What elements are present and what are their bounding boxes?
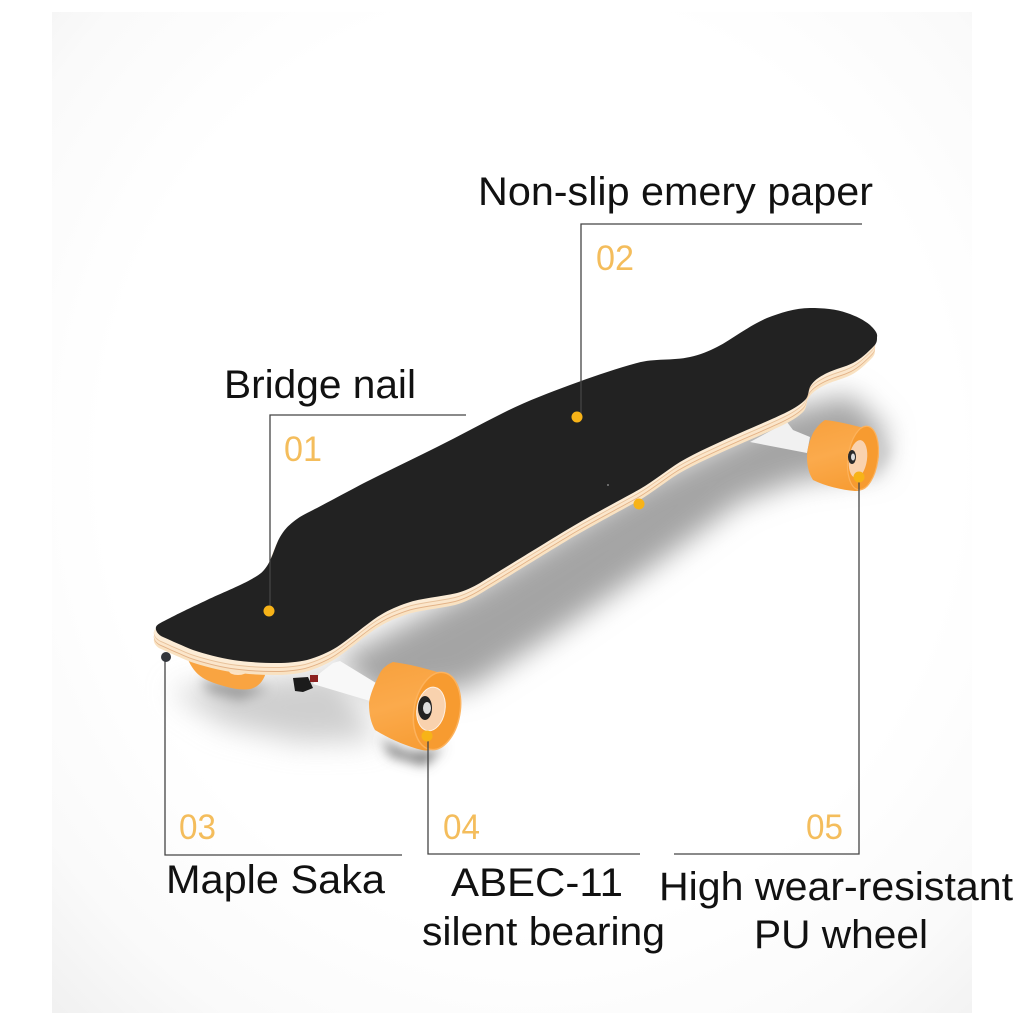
back right wheel <box>807 420 882 492</box>
callout 05: high wear-resistant PU wheel: PU wheel <box>754 913 928 957</box>
callout 02: non-slip emery paper: Non-slip emery paper <box>478 170 873 214</box>
callout 03: maple saka: 03 <box>179 808 216 847</box>
front wheel <box>369 662 466 753</box>
callout 03: maple saka: Maple Saka <box>166 858 386 902</box>
callout 01: bridge nail: Bridge nail <box>224 363 416 407</box>
callout 02: non-slip emery paper: 02 <box>596 239 634 278</box>
deck: maple plywood edge and grip tape <box>154 308 877 675</box>
callout 04: ABEC-11 silent bearing: ABEC-11 <box>451 861 623 905</box>
callout 05: high wear-resistant PU wheel: High wear-resistant <box>659 865 1013 909</box>
far truck (white hanger) <box>750 422 810 453</box>
callout 04: ABEC-11 silent bearing: silent bearing <box>422 910 665 954</box>
rear truck and back wheel <box>185 652 266 690</box>
front truck (white hanger) <box>293 661 376 701</box>
callout 01: bridge nail: 01 <box>284 430 322 469</box>
callout 04: ABEC-11 silent bearing: 04 <box>443 808 480 847</box>
marker dot under deck <box>634 498 644 510</box>
callout 03: maple saka <box>161 652 402 902</box>
callout 02: non-slip emery paper <box>478 170 873 422</box>
callout 01: bridge nail <box>224 363 466 616</box>
callout 04: ABEC-11 silent bearing <box>422 730 665 954</box>
callout 05: high wear-resistant PU wheel <box>659 472 1013 957</box>
board shadow <box>170 395 890 765</box>
callout 05: high wear-resistant PU wheel: 05 <box>806 808 843 847</box>
